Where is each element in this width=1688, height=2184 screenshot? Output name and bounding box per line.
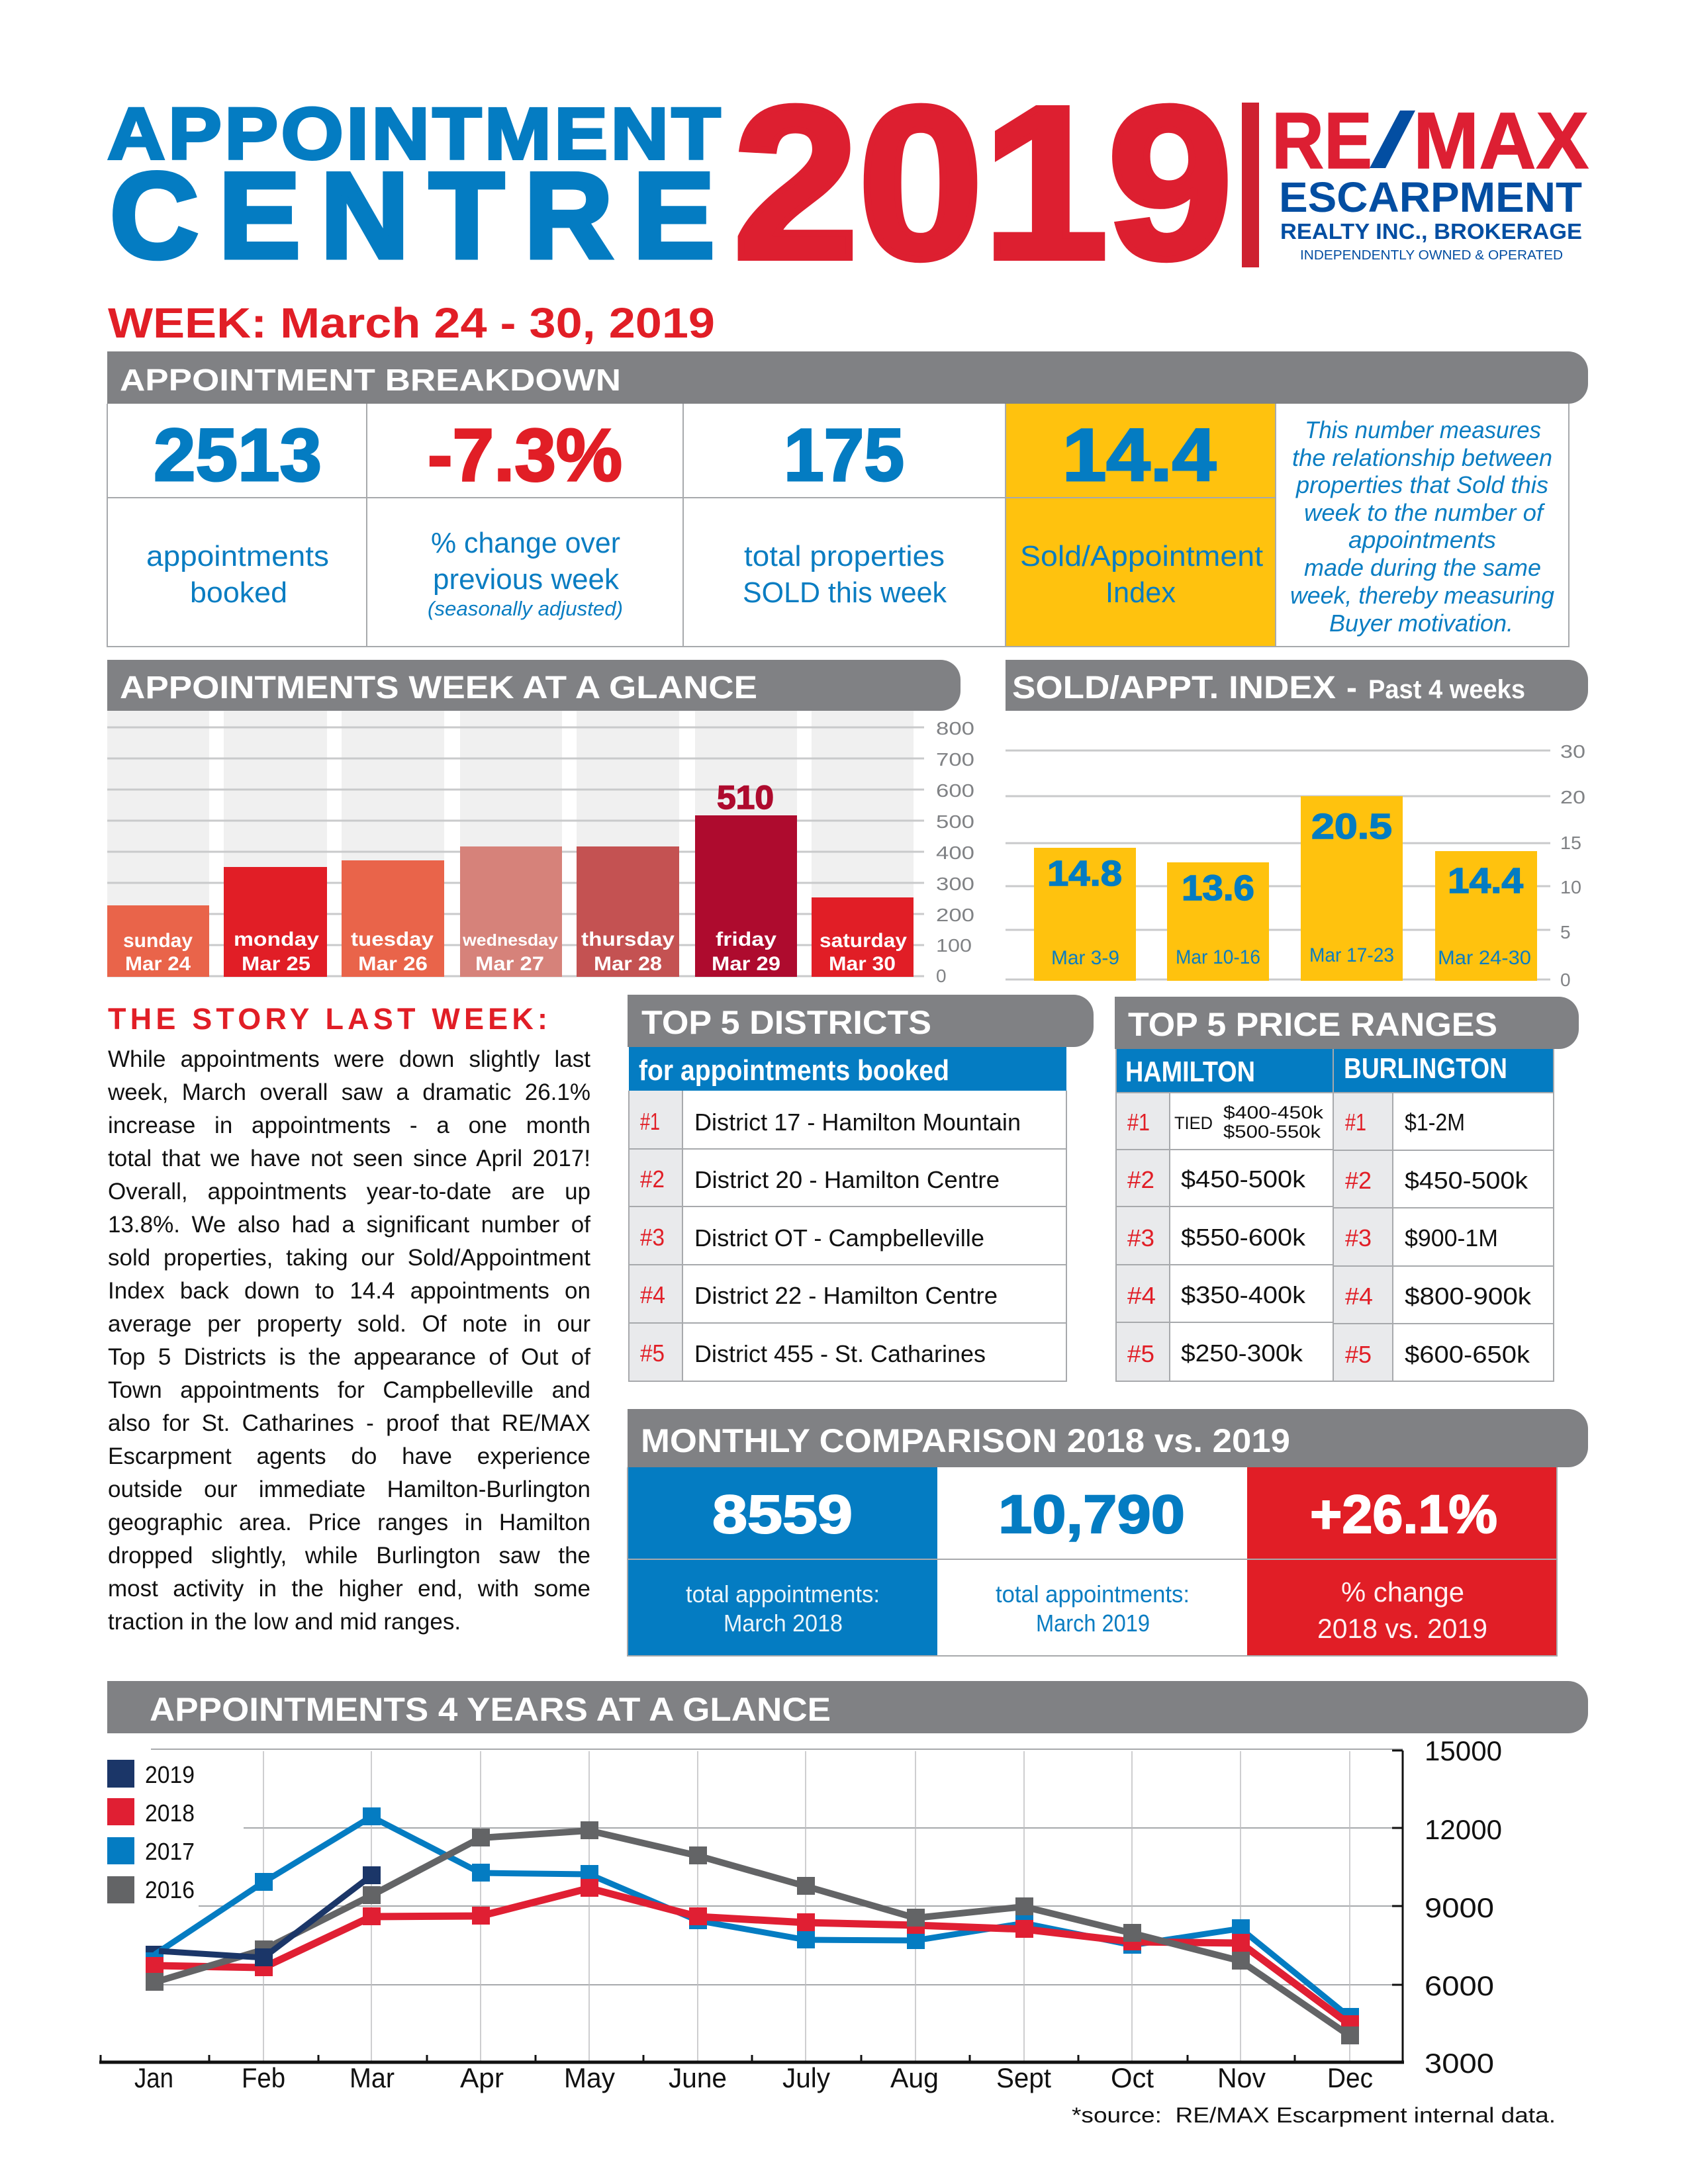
y axis labels: 800 xyxy=(936,718,974,739)
subheading bar xyxy=(629,1047,1066,1091)
title line: appointment: APPOINTMENT xyxy=(107,93,724,175)
heading bar: 4 years: APPOINTMENTS 4 YEARS AT A GLANCE xyxy=(150,1691,831,1728)
heading bar: sold appt index xyxy=(1006,660,1588,711)
heading bar: top 5 districts: TOP 5 DISTRICTS xyxy=(641,1004,931,1041)
logo word: MAX: MAX xyxy=(1413,95,1589,185)
x axis month labels: Aug xyxy=(890,2062,939,2093)
Hamilton rows: $500-550k xyxy=(1223,1122,1321,1142)
cell: change red: % change xyxy=(1341,1576,1464,1608)
panel cell: yellow index xyxy=(1006,404,1276,647)
week heading: WEEK: March 24 - 30, 2019 xyxy=(108,299,715,347)
bar: Mar 10-16 xyxy=(1167,862,1269,981)
cell: change red: 2018 vs. 2019 xyxy=(1317,1613,1487,1644)
label: percent change: (seasonally adjusted) xyxy=(428,597,623,620)
subheading bar: for appointments booked xyxy=(639,1054,949,1087)
bar: Mar 3-9: 14.8 xyxy=(1047,854,1122,893)
subheading: Hamilton: HAMILTON xyxy=(1125,1056,1255,1088)
title line: centre: CENTRE xyxy=(110,147,735,283)
label: sold appointment index: Index xyxy=(1105,576,1176,609)
bar: wednesday xyxy=(460,846,562,977)
bar chart: appointments by day xyxy=(107,711,974,986)
subheading: Hamilton xyxy=(1116,1049,1333,1093)
Burlington rows: $800-900k xyxy=(1405,1283,1532,1310)
logo line: Realty: REALTY INC., BROKERAGE xyxy=(1280,219,1582,244)
title: Appointment Centre 2019 xyxy=(107,62,1233,304)
story heading: THE STORY LAST WEEK: xyxy=(108,1002,547,1036)
bar: Mar 10-16: Mar 10-16 xyxy=(1176,946,1260,968)
legend: 2018 xyxy=(145,1799,195,1827)
text block: the story last week: increase in appointments - a one month xyxy=(108,1113,590,1138)
bar: Mar 17-23: 20.5 xyxy=(1311,807,1392,846)
text block: the story last week: While appointments were down slightly last xyxy=(108,1046,590,1072)
text block: the story last week: total that we have not seen since April 2017! xyxy=(108,1146,590,1171)
day labels xyxy=(123,929,907,975)
x axis month labels: Nov xyxy=(1217,2062,1266,2093)
text block: the story last week: sold properties, taking our Sold/Appointment xyxy=(108,1245,590,1271)
label: total properties: SOLD this week xyxy=(743,576,947,609)
heading bar: top 5 districts xyxy=(628,995,1094,1047)
cell: 2018 blue xyxy=(628,1467,937,1656)
district rows: District OT - Campbelleville xyxy=(694,1224,984,1251)
stat: 2513: 2513 xyxy=(154,414,322,496)
label: percent change: previous week xyxy=(433,563,620,596)
bar: friday xyxy=(695,815,797,977)
bar: Mar 3-9 xyxy=(1034,848,1136,981)
Hamilton rows: #2 xyxy=(1127,1166,1154,1193)
subheading: Burlington xyxy=(1333,1049,1554,1093)
value label: 510: 510 xyxy=(717,779,774,816)
day labels: Mar 26 xyxy=(358,953,428,975)
panel: appointments 4 years at a glance xyxy=(99,1681,1588,2093)
day labels: Mar 25 xyxy=(242,953,310,975)
stat: 14.4: 14.4 xyxy=(1062,414,1216,496)
Burlington rows xyxy=(1345,1109,1532,1368)
series: 2017 xyxy=(146,1807,1359,2026)
y axis labels xyxy=(936,718,974,986)
x axis month labels: Feb xyxy=(242,2062,285,2093)
cell: change red: +26.1% xyxy=(1310,1484,1497,1545)
heading bar: appointment breakdown xyxy=(107,351,1588,404)
explanation note: Buyer motivation. xyxy=(1329,610,1513,637)
title year: 2019: 2019 xyxy=(733,62,1233,304)
cell: 2018 blue: total appointments: xyxy=(686,1580,880,1608)
label: total properties xyxy=(743,540,947,609)
Hamilton rows: $550-600k xyxy=(1181,1224,1306,1251)
Burlington rows: #2 xyxy=(1345,1167,1372,1194)
Hamilton rows: #1 xyxy=(1127,1109,1150,1136)
stat: 175: 175 xyxy=(784,414,904,496)
y axis labels: 300 xyxy=(936,874,974,894)
logo: RE/MAX Escarpment xyxy=(1272,95,1589,263)
text block: the story last week: week, March overall saw a dramatic 26.1% xyxy=(108,1079,590,1105)
district rows: #1 xyxy=(640,1108,660,1135)
panel: appointments week at a glance xyxy=(107,660,974,986)
y axis labels: 3000 xyxy=(1425,2048,1494,2079)
y axis labels xyxy=(1560,741,1585,990)
district rows: District 17 - Hamilton Mountain xyxy=(694,1109,1021,1136)
y axis labels: 9000 xyxy=(1425,1892,1494,1923)
legend: 2016 xyxy=(145,1876,195,1903)
bar: saturday xyxy=(812,897,914,977)
district rows: District 455 - St. Catharines xyxy=(694,1340,986,1367)
Burlington rows: $450-500k xyxy=(1405,1167,1528,1194)
subheading: Burlington: BURLINGTON xyxy=(1344,1052,1507,1085)
legend: 2017 xyxy=(145,1838,195,1865)
line chart: monthly appointments xyxy=(99,1735,1502,2093)
y axis labels: 700 xyxy=(936,749,974,770)
bar: Mar 3-9: Mar 3-9 xyxy=(1051,947,1119,969)
y axis labels: 0 xyxy=(936,966,947,986)
y axis labels: 5 xyxy=(1560,922,1571,942)
x axis month labels: Apr xyxy=(460,2062,504,2093)
y axis labels: 12000 xyxy=(1425,1814,1502,1845)
label: appointments booked xyxy=(146,540,329,609)
x axis month labels: Dec xyxy=(1327,2062,1373,2093)
x axis month labels: Jan xyxy=(134,2062,173,2093)
district rows: #3 xyxy=(640,1224,665,1251)
Burlington rows: $1-2M xyxy=(1405,1109,1465,1136)
y axis labels xyxy=(1425,1735,1502,2079)
logo slash xyxy=(1370,111,1415,168)
y axis labels: 100 xyxy=(936,935,972,956)
table grid xyxy=(107,404,1569,647)
heading bar: week at a glance: APPOINTMENTS WEEK AT A GLANCE xyxy=(120,670,757,705)
label: total properties: total properties xyxy=(744,540,945,572)
explanation note: made during the same xyxy=(1304,554,1541,581)
cell: 2019 white: March 2019 xyxy=(1036,1610,1150,1637)
x axis month labels: Mar xyxy=(350,2062,395,2093)
Hamilton rows: $250-300k xyxy=(1181,1340,1303,1367)
rank columns xyxy=(1116,1093,1393,1381)
district rows: District 20 - Hamilton Centre xyxy=(694,1166,1000,1193)
series: 2019 xyxy=(159,1866,381,1966)
panel: monthly comparison xyxy=(628,1409,1588,1656)
bar: sunday xyxy=(107,905,209,977)
day labels: sunday xyxy=(123,930,193,952)
heading bar: 4 years xyxy=(107,1681,1588,1733)
panel: top 5 districts xyxy=(628,995,1094,1381)
y axis labels: 15000 xyxy=(1425,1735,1502,1766)
panel: sold/appt index xyxy=(1006,660,1588,990)
Hamilton rows: #3 xyxy=(1127,1224,1154,1251)
day labels: monday xyxy=(234,929,319,950)
text block: the story last week: dropped slightly, while Burlington saw the xyxy=(108,1543,590,1569)
text block: the story last week: average per property sold. Of note in our xyxy=(108,1311,590,1337)
Burlington rows: #1 xyxy=(1345,1109,1366,1136)
explanation note: properties that Sold this xyxy=(1295,471,1548,498)
Burlington rows: $900-1M xyxy=(1405,1224,1498,1251)
bar: Mar 24-30 xyxy=(1435,851,1537,981)
bar: Mar 24-30: 14.4 xyxy=(1448,861,1523,901)
y axis labels: 200 xyxy=(936,905,974,925)
Burlington rows: #4 xyxy=(1345,1283,1373,1310)
stat: -7.3%: -7.3% xyxy=(428,414,622,496)
cell: 2019 white: 10,790 xyxy=(998,1484,1185,1545)
cell: change red xyxy=(1247,1467,1557,1656)
cell: 2018 blue: 8559 xyxy=(712,1484,853,1545)
y axis labels: 600 xyxy=(936,780,974,801)
text block: the story last week: Town appointments for Campbelleville and xyxy=(108,1377,590,1403)
label: percent change xyxy=(428,527,623,620)
day labels: Mar 28 xyxy=(594,953,662,975)
explanation note xyxy=(1290,416,1554,637)
y axis labels: 15 xyxy=(1560,833,1581,853)
heading bar: top 5 price ranges xyxy=(1115,997,1579,1049)
day labels: Mar 24 xyxy=(125,953,191,975)
bar chart: index past 4 weeks xyxy=(1006,741,1585,990)
label: appointments booked: booked xyxy=(190,576,287,609)
bar: tuesday xyxy=(342,860,444,977)
explanation note: week, thereby measuring xyxy=(1290,582,1554,609)
logo line: independently owned: INDEPENDENTLY OWNED & OPERATED xyxy=(1300,248,1563,263)
x axis month labels: Sept xyxy=(996,2062,1051,2093)
logo line: Escarpment: ESCARPMENT xyxy=(1279,173,1582,221)
explanation note: appointments xyxy=(1348,526,1496,553)
logo word: RE: RE xyxy=(1272,95,1372,185)
heading bar: sold appt index: SOLD/APPT. INDEX xyxy=(1012,670,1336,705)
heading bar: monthly comparison: MONTHLY COMPARISON 2018 vs. 2019 xyxy=(641,1422,1290,1459)
Hamilton rows: $450-500k xyxy=(1181,1165,1306,1193)
heading bar: sold appt index: - xyxy=(1346,670,1357,705)
explanation note: week to the number of xyxy=(1304,499,1546,526)
Burlington rows: #5 xyxy=(1345,1341,1372,1368)
series: 2019 base xyxy=(146,1946,164,1964)
text block: the story last week: Index back down to 14.4 appointments on xyxy=(108,1278,590,1304)
legend xyxy=(107,1760,195,1903)
day labels: Mar 30 xyxy=(829,953,896,975)
text block: the story last week: traction in the low and mid ranges. xyxy=(108,1609,461,1635)
legend: 2019 xyxy=(145,1761,195,1788)
text block: the story last week: outside our immediate Hamilton-Burlington xyxy=(108,1477,590,1502)
x axis month labels xyxy=(134,2062,1373,2093)
series: 2018 xyxy=(146,1879,1359,2033)
text block: the story last week: most activity in the higher end, with some xyxy=(108,1576,590,1602)
text block: the story last week: geographic area. Price ranges in Hamilton xyxy=(108,1510,590,1535)
heading bar: sold appt index: Past 4 weeks xyxy=(1368,675,1525,704)
bar: Mar 24-30: Mar 24-30 xyxy=(1438,947,1531,969)
x axis month labels: Oct xyxy=(1111,2062,1154,2093)
day labels: thursday xyxy=(581,929,675,950)
day labels: friday xyxy=(716,929,776,950)
day labels: tuesday xyxy=(351,929,434,950)
cell: 2019 white: total appointments: xyxy=(996,1580,1190,1608)
x axis month labels: July xyxy=(782,2062,830,2093)
Hamilton rows: #5 xyxy=(1127,1340,1154,1367)
text block: the story last week: 13.8%. We also had a significant number of xyxy=(108,1212,590,1238)
explanation note: This number measures xyxy=(1305,416,1541,443)
explanation note: the relationship between xyxy=(1292,444,1552,471)
bar: Mar 10-16: 13.6 xyxy=(1182,868,1254,908)
text block: the story last week: also for St. Catharines - proof that RE/MAX xyxy=(108,1410,590,1436)
Burlington rows: #3 xyxy=(1345,1224,1372,1251)
vertical red divider xyxy=(1242,103,1259,267)
district rows xyxy=(640,1108,1021,1367)
district rows: #4 xyxy=(640,1281,665,1308)
rank column xyxy=(629,1091,682,1381)
label: sold appointment index: Sold/Appointment xyxy=(1020,540,1263,572)
panel: appointment breakdown xyxy=(107,351,1588,647)
district rows: #2 xyxy=(640,1165,665,1193)
day labels: saturday xyxy=(820,930,907,952)
day labels: Mar 27 xyxy=(475,953,544,975)
y axis labels: 400 xyxy=(936,842,974,863)
y axis labels: 10 xyxy=(1560,877,1581,897)
y axis labels: 20 xyxy=(1560,787,1585,807)
series: 2016 xyxy=(146,1821,1359,2044)
Hamilton rows: TIED xyxy=(1174,1113,1213,1133)
heading bar: top 5 price ranges: TOP 5 PRICE RANGES xyxy=(1128,1006,1497,1043)
bar: Mar 17-23: Mar 17-23 xyxy=(1309,944,1394,966)
panel: top 5 price ranges xyxy=(1115,997,1579,1381)
text block: the story last week: Escarpment agents do have experience xyxy=(108,1443,590,1469)
y axis labels: 0 xyxy=(1560,970,1571,990)
label: sold appointment index xyxy=(1020,540,1263,609)
text block: the story last week: Top 5 Districts is the appearance of Out of xyxy=(108,1344,590,1370)
y axis labels: 30 xyxy=(1560,741,1585,762)
Burlington rows: $600-650k xyxy=(1405,1341,1530,1368)
cell: 2018 blue: March 2018 xyxy=(724,1610,843,1637)
label: appointments booked: appointments xyxy=(146,540,329,572)
y axis labels: 500 xyxy=(936,811,974,832)
x axis month labels: June xyxy=(669,2062,727,2093)
text block: the story last week xyxy=(108,1046,590,1635)
day labels: wednesday xyxy=(462,931,558,950)
cell: 2019 white xyxy=(937,1467,1247,1656)
heading bar: week at a glance xyxy=(107,660,961,711)
Hamilton rows xyxy=(1127,1103,1324,1367)
Hamilton rows: #4 xyxy=(1127,1282,1156,1309)
day labels: Mar 29 xyxy=(712,953,780,975)
y axis labels: 6000 xyxy=(1425,1970,1494,2001)
bar: Mar 17-23 xyxy=(1301,796,1403,981)
bar: monday xyxy=(224,867,327,977)
district rows: #5 xyxy=(640,1340,665,1367)
Hamilton rows: $350-400k xyxy=(1181,1281,1306,1308)
heading bar: appointment breakdown: APPOINTMENT BREAKDOWN xyxy=(120,363,621,397)
district rows: District 22 - Hamilton Centre xyxy=(694,1282,998,1309)
text block: the story last week: Overall, appointments year-to-date are up xyxy=(108,1179,590,1205)
Hamilton rows: $400-450k xyxy=(1223,1103,1324,1122)
label: percent change: % change over xyxy=(431,527,620,559)
x axis month labels: May xyxy=(564,2062,615,2093)
heading bar: monthly comparison xyxy=(628,1409,1588,1467)
bar: thursday xyxy=(577,846,679,977)
source note: *source: RE/MAX Escarpment internal data. xyxy=(1072,2103,1556,2127)
